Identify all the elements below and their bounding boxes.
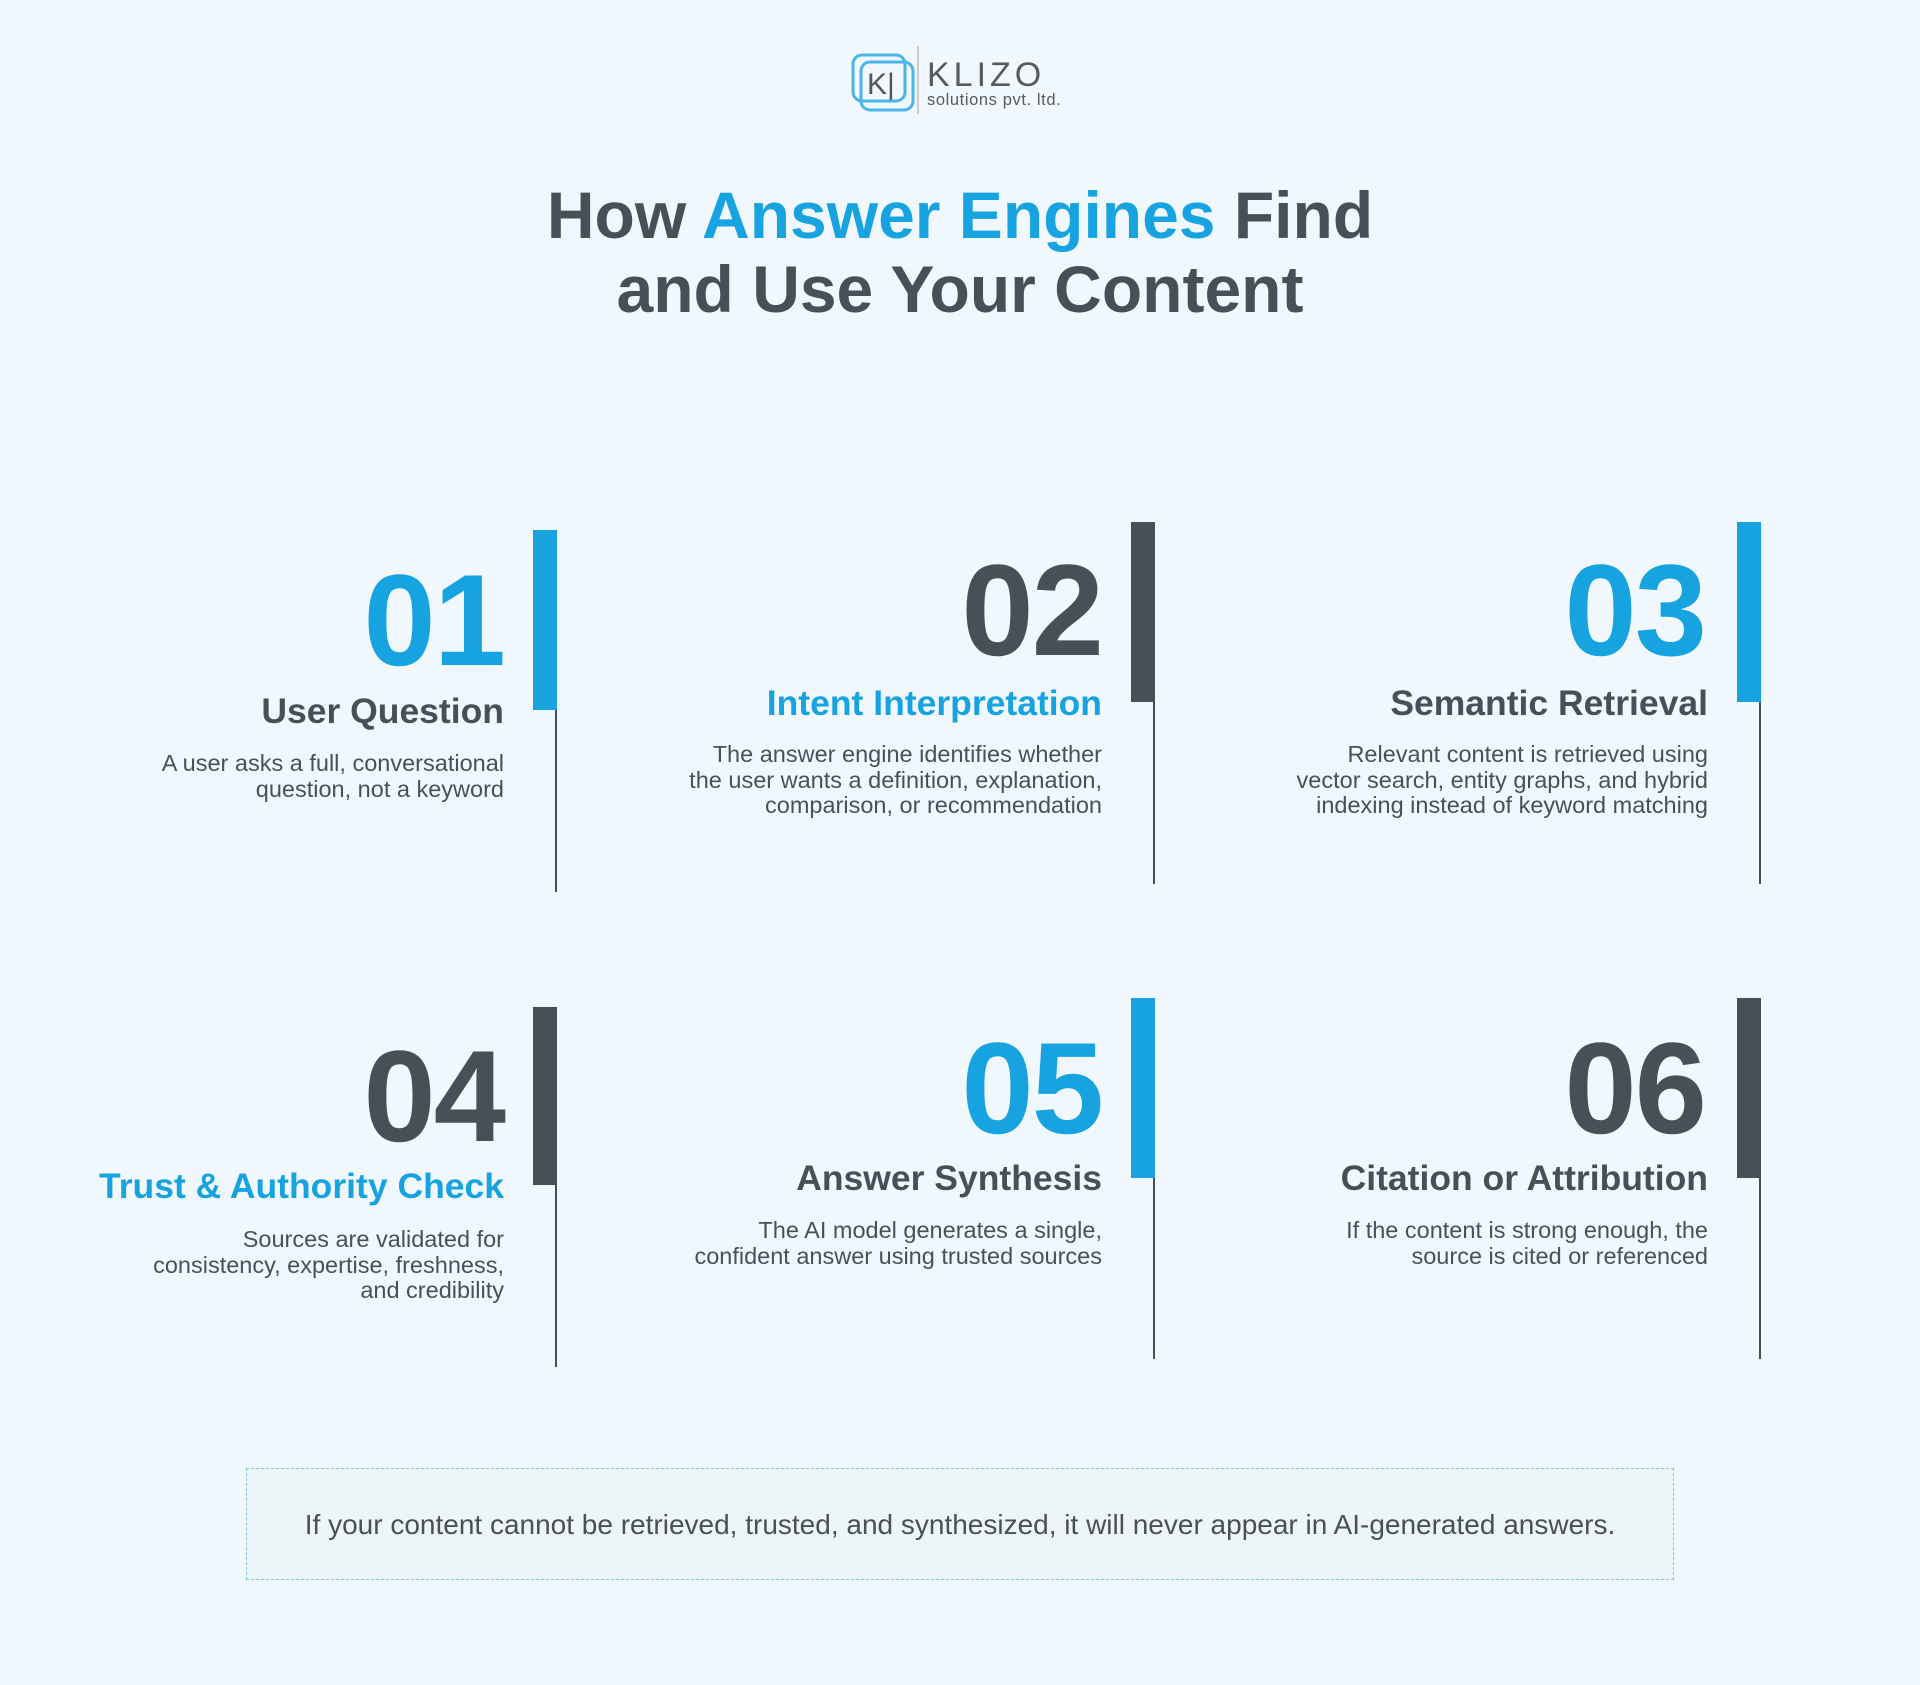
logo — [852, 46, 1061, 114]
title: How Answer Engines Find — [547, 178, 1373, 252]
number: 01 — [363, 547, 504, 693]
description — [1346, 1217, 1708, 1268]
title: and Use Your Content — [617, 252, 1303, 326]
number: 02 — [961, 537, 1102, 683]
card 05 — [694, 998, 1155, 1359]
description: The AI model generates a single, — [758, 1217, 1102, 1243]
logo: solutions pvt. ltd. — [927, 91, 1061, 109]
heading: Answer Synthesis — [796, 1158, 1102, 1198]
description: Sources are validated for — [243, 1226, 504, 1252]
description: vector search, entity graphs, and hybrid — [1297, 766, 1708, 792]
number: 05 — [961, 1015, 1102, 1161]
description: Relevant content is retrieved using — [1347, 741, 1708, 767]
heading: Trust & Authority Check — [99, 1166, 504, 1206]
number: 03 — [1564, 537, 1705, 683]
description — [1296, 741, 1708, 818]
description: consistency, expertise, freshness, — [153, 1252, 504, 1278]
number: 04 — [363, 1023, 504, 1169]
description: A user asks a full, conversational — [162, 750, 504, 776]
callout: bottom note — [246, 1468, 1674, 1580]
heading: Semantic Retrieval — [1390, 683, 1708, 723]
icon: klizo mark: K| — [867, 68, 895, 101]
icon: klizo mark — [852, 54, 914, 112]
heading: Citation or Attribution — [1341, 1158, 1708, 1198]
title — [547, 178, 1373, 326]
description: and credibility — [360, 1277, 504, 1303]
card 06 — [1341, 998, 1761, 1359]
card 04 — [99, 1007, 557, 1367]
description — [153, 1226, 504, 1303]
card 03 — [1296, 522, 1761, 884]
description — [694, 1217, 1102, 1269]
description: the user wants a definition, explanation, — [689, 766, 1102, 792]
description — [689, 741, 1102, 818]
description: comparison, or recommendation — [765, 792, 1102, 818]
description: The answer engine identifies whether — [713, 741, 1102, 767]
card 02 — [689, 522, 1155, 884]
number: 06 — [1564, 1015, 1705, 1161]
callout: bottom note: If your content cannot be retrieved, trusted, and synthesized, it will never appear in AI-generated answers. — [305, 1509, 1615, 1540]
description: If the content is strong enough, the — [1346, 1217, 1708, 1243]
card 01 — [162, 530, 557, 892]
description: source is cited or referenced — [1411, 1242, 1708, 1268]
description: indexing instead of keyword matching — [1316, 792, 1708, 818]
description — [162, 750, 504, 802]
heading: User Question — [261, 691, 504, 731]
description: question, not a keyword — [256, 776, 504, 802]
brand name: KLIZO — [927, 56, 1045, 94]
description: confident answer using trusted sources — [694, 1242, 1102, 1268]
heading: Intent Interpretation — [767, 683, 1102, 723]
